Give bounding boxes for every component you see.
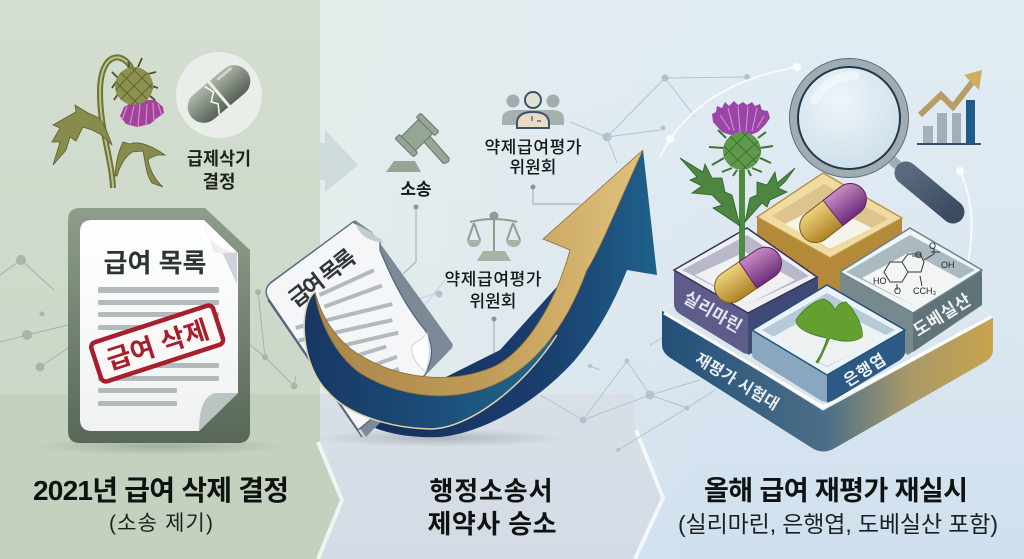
platform: side (662, 310, 993, 452)
label: committee 2: 약제급여평가 (444, 270, 542, 289)
connector: committee 1 (533, 187, 580, 204)
label: dobesilate: 도베실산 (910, 290, 975, 340)
label: silymarin: 실리마린 (680, 288, 745, 336)
label: tilted document title: 급여 목록 (284, 244, 361, 312)
heading: step 2: 제약사 승소 (428, 509, 556, 539)
plant: healthy thistle (680, 101, 795, 262)
chevron divider left (318, 442, 342, 559)
icon: gavel (386, 113, 449, 172)
panel: middle lower band (320, 394, 663, 559)
label: lawsuit: 소송 (400, 180, 432, 199)
arrow: gold band (315, 150, 643, 396)
tray: silymarin (674, 101, 818, 355)
connector: lawsuit (403, 207, 416, 274)
arrow: inner navy band (304, 292, 557, 429)
heading: step 1: 2021년 급여 삭제 결정 (33, 475, 289, 506)
capsule on gold tray (793, 177, 873, 249)
panel: left background (0, 0, 320, 559)
subheading: step 1: (소송 제기) (109, 512, 213, 535)
upward arrow (304, 150, 657, 437)
chemical structure (873, 241, 954, 296)
label: pill decision: 결정 (202, 172, 236, 192)
subheading: step 3: (실리마린, 은행엽, 도베실산 포함) (678, 511, 998, 537)
stamp: benefit deleted (90, 304, 224, 383)
panel: left lower band with chevron (0, 394, 342, 559)
heading: step 2: 행정소송서 (430, 476, 552, 506)
panel: middle background (320, 0, 700, 559)
panel: right background (320, 0, 1024, 559)
icon: broken pill in circle (176, 52, 262, 138)
document: benefits list with stamp (35, 208, 285, 455)
document: tilted benefits list (265, 220, 565, 447)
test bench platform (662, 225, 993, 452)
heading: step 2 (428, 476, 556, 539)
tray: gold (757, 173, 902, 305)
label: committee 2 (444, 270, 542, 311)
platform: top (662, 225, 993, 410)
tray: ginkgo (752, 285, 905, 403)
label: committee 1 (484, 138, 582, 177)
chevron divider right (635, 430, 663, 559)
heading: document title: 급여 목록 (104, 248, 206, 278)
label: pill decision (187, 149, 251, 192)
icon: growth chart (917, 70, 982, 144)
label: ginkgo: 은행엽 (840, 350, 889, 390)
label: pill decision: 급제삭기 (187, 149, 251, 169)
chemical structure: O (894, 286, 901, 296)
arrow: dark outer body and head (375, 150, 657, 437)
connector: committee 2 (493, 319, 495, 365)
label: committee 1: 약제급여평가 (484, 138, 582, 157)
icon: wilted thistle (52, 57, 165, 188)
chemical structure: O (929, 241, 936, 251)
network pattern (0, 63, 972, 452)
arrow: cream rim (304, 292, 557, 429)
label: committee 2: 위원회 (470, 292, 516, 311)
chemical structure: O (915, 250, 922, 260)
label: test bench: 재평가 시험대 (692, 350, 782, 414)
capsule on silymarin tray (708, 241, 788, 309)
label: committee 1: 위원회 (510, 158, 556, 177)
icon: ginkgo leaf (796, 299, 862, 363)
stamp: benefit deleted: 급여 삭제 (103, 314, 213, 376)
chemical structure: HO (873, 276, 886, 286)
heading: step 3: 올해 급여 재평가 재실시 (704, 476, 968, 506)
tray: dobesilate (840, 228, 982, 355)
chemical structure: OH (941, 260, 954, 270)
icon: scales (467, 212, 521, 261)
chemical structure: CCH₃ (913, 286, 936, 296)
icon: committee people (502, 92, 564, 128)
icon: magnifying glass (790, 58, 953, 212)
faded process arrow (320, 130, 358, 192)
